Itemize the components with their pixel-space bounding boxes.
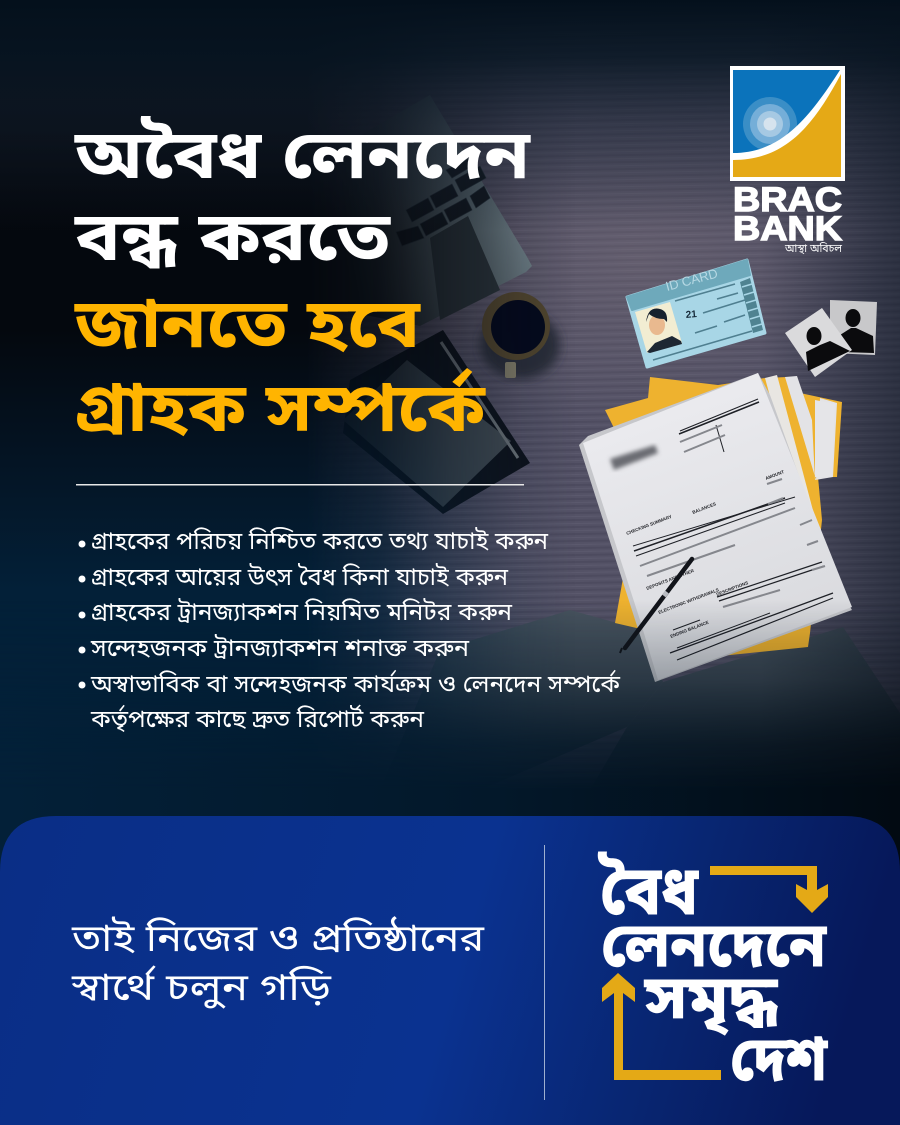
bullet 2: গ্রাহকের আয়ের উৎস বৈধ কিনা যাচাই করুন [91, 563, 509, 591]
logo yellow field [733, 74, 841, 177]
logo: BRAC Bank [730, 66, 845, 255]
lockup word 3: সমৃদ্ধ [644, 964, 778, 1035]
arrow: top right [710, 866, 828, 913]
lockup word 1: বৈধ [598, 852, 699, 929]
campaign lockup [598, 852, 828, 1094]
blurred bank logo [610, 445, 658, 470]
dark overlay top [0, 0, 900, 230]
call to action text: স্বার্থে চলুন গড়ি [71, 964, 332, 1009]
paper labels: ELECTRONIC WITHDRAWALS [658, 587, 720, 615]
logo wordmark: BRAC [733, 181, 842, 219]
paper labels [626, 469, 785, 639]
coffee cup [480, 292, 560, 379]
paper labels: BALANCES [692, 501, 717, 515]
arrow: bottom left [602, 973, 721, 1080]
paper labels: AMOUNT [765, 469, 785, 481]
heading line 4: গ্রাহক সম্পর্কে [75, 367, 486, 446]
lockup word 2: লেনদেনে [601, 911, 827, 980]
lower right sheet [590, 627, 900, 790]
notebook [343, 330, 530, 514]
heading [74, 116, 531, 446]
icon: id card [627, 260, 765, 367]
icon: id card: 21 [685, 309, 698, 321]
icon: yellow folder and papers [605, 375, 842, 663]
paper labels: DEPOSITS AND OTHER [646, 568, 695, 591]
paper labels: ENDING BALANCE [670, 620, 709, 639]
heading line 3: জানতে হবে [74, 286, 421, 362]
laptop [290, 95, 532, 326]
bullet 5: কর্তৃপক্ষের কাছে দ্রুত রিপোর্ট করুন [90, 704, 425, 733]
lower left sheet [380, 610, 663, 790]
panel: bottom call to action [0, 816, 900, 1125]
dark overlay bottom [0, 600, 900, 890]
lockup word 4: দেশ [730, 1025, 828, 1094]
bullet 1: গ্রাহকের পরিচয় নিশ্চিত করতে তথ্য যাচাই করুন [91, 527, 549, 555]
heading line 2: বন্ধ করতে [74, 199, 391, 275]
bullet 5 [78, 669, 621, 733]
bullet list [78, 527, 621, 733]
bullet 5: অস্বাভাবিক বা সন্দেহজনক কার্যক্রম ও লেনদেন সম্পর্কে [90, 669, 621, 698]
logo tagline: আস্থা অবিচল [784, 242, 843, 255]
dark overlay left [0, 41, 540, 768]
logo: BRAC Bank: BANK [733, 210, 842, 248]
icon: statement paper [579, 373, 852, 682]
icon: pen [620, 559, 692, 653]
dark overlay right [760, 0, 900, 820]
bullet 3: গ্রাহকের ট্রানজ্যাকশন নিয়মিত মনিটর করুন [91, 598, 513, 626]
paper labels: CHECKING SUMMARY [626, 514, 672, 536]
heading line 1: অবৈধ লেনদেন [74, 116, 531, 193]
logo sun rings [743, 97, 797, 151]
call to action text [71, 915, 485, 1009]
paper labels: DESCRIPTIONS [716, 580, 749, 597]
icon: id card: ID CARD [664, 266, 719, 294]
icon: silhouette photos [785, 300, 877, 377]
call to action text: তাই নিজের ও প্রতিষ্ঠানের [71, 915, 485, 960]
bullet 4: সন্দেহজনক ট্রানজ্যাকশন শনাক্ত করুন [90, 634, 470, 662]
